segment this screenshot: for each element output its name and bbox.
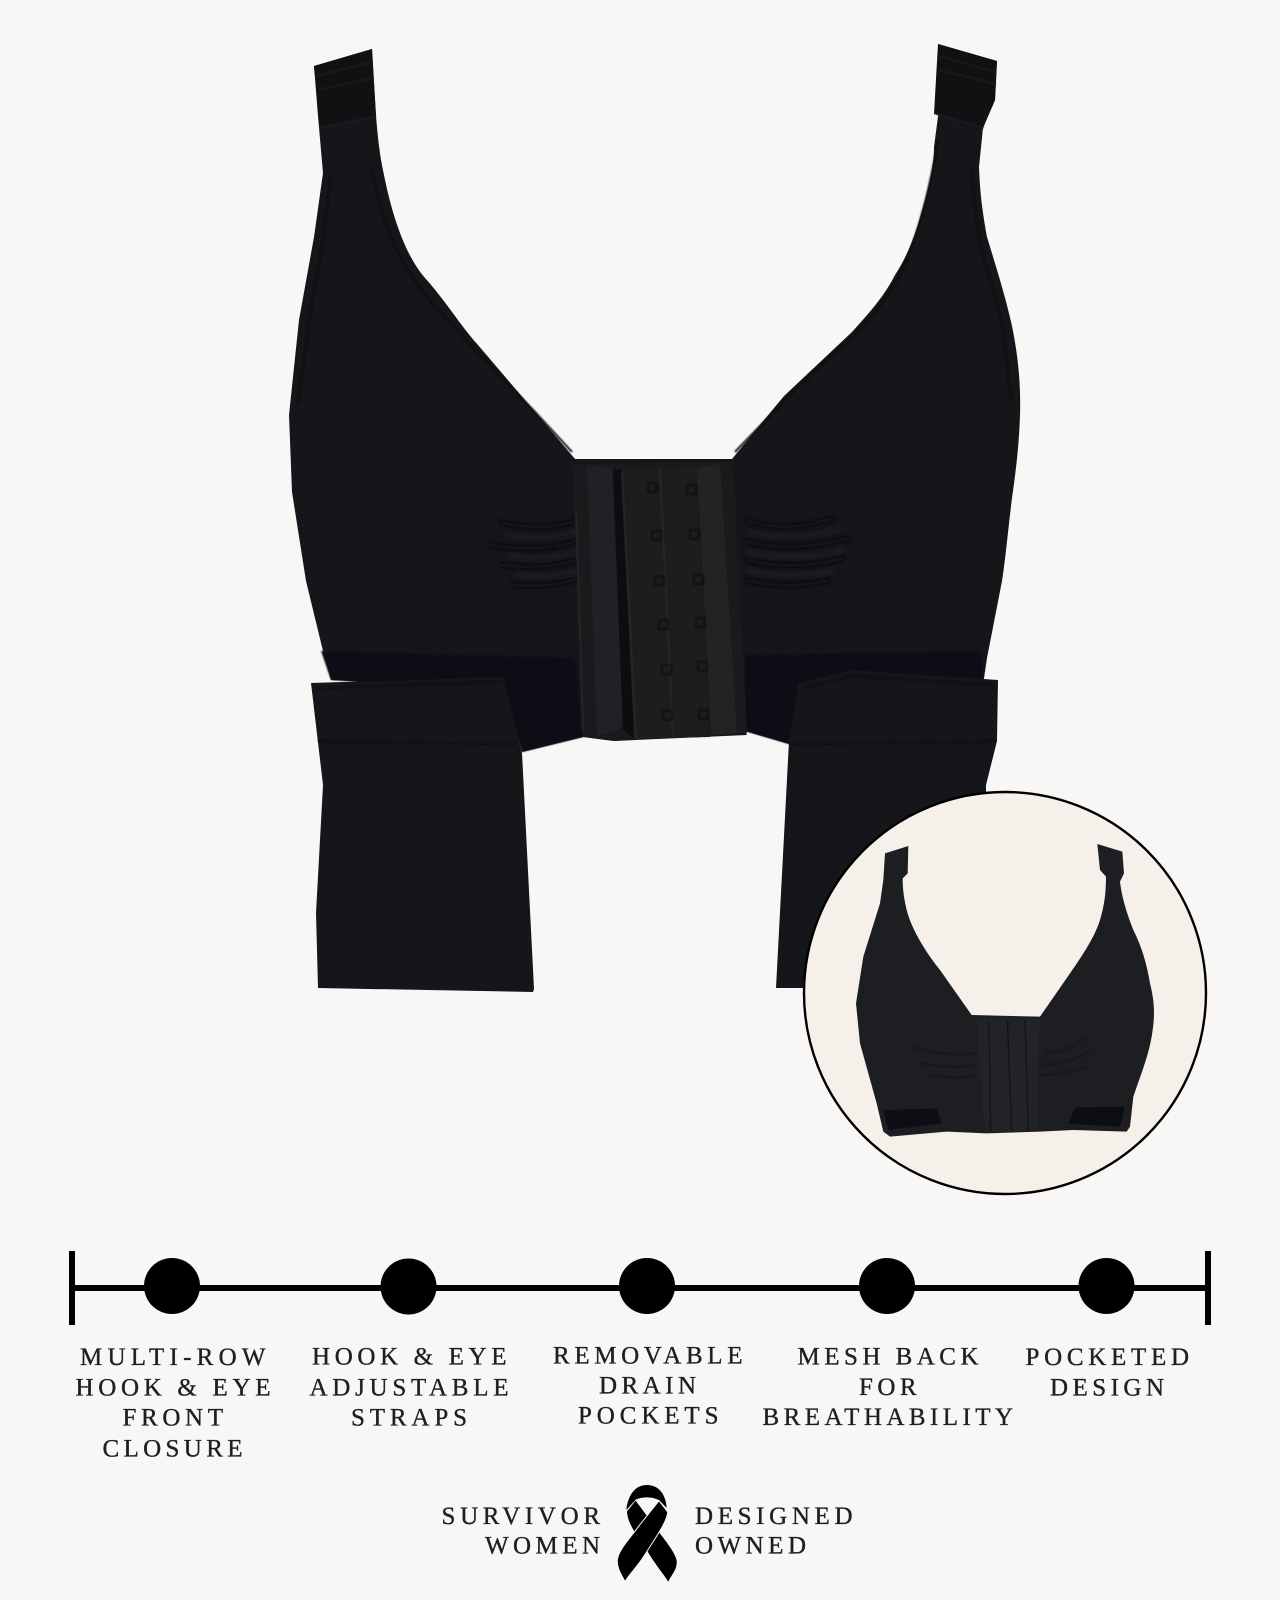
feature label: front closure: FRONT <box>122 1404 223 1432</box>
feature label: adjustable straps: STRAPS <box>351 1404 467 1432</box>
inset ruching <box>913 1037 1090 1077</box>
feature label: front closure: CLOSURE <box>102 1436 242 1462</box>
left drain pocket <box>311 677 534 992</box>
inset circle: bra with pockets removed <box>804 792 1206 1194</box>
feature label: drain pockets <box>553 1342 742 1430</box>
feature marker 4 <box>859 1258 915 1314</box>
under band <box>321 651 983 752</box>
feature label: mesh back: MESH BACK <box>798 1344 978 1370</box>
feature label: drain pockets: REMOVABLE <box>553 1342 742 1370</box>
text: survivor women <box>442 1503 600 1560</box>
feature label: pocketed design: DESIGN <box>1050 1374 1164 1402</box>
icon: awareness ribbon <box>617 1485 677 1582</box>
feature marker 5 <box>1078 1258 1134 1314</box>
hook tape <box>622 468 710 739</box>
satin placket left <box>587 465 623 737</box>
bra body <box>289 44 1020 752</box>
text: survivor women: SURVIVOR <box>442 1503 600 1530</box>
feature label: mesh back <box>762 1344 1013 1431</box>
strap adjusters <box>314 44 997 128</box>
hook eyes <box>648 483 708 720</box>
feature label: pocketed design <box>1026 1344 1189 1402</box>
feature label: adjustable straps: ADJUSTABLE <box>310 1374 508 1402</box>
feature label: adjustable straps <box>310 1344 508 1432</box>
feature marker 1 <box>144 1258 200 1314</box>
feature marker 3 <box>619 1258 675 1314</box>
main product photo: bra with drain pockets <box>289 44 1020 992</box>
feature label: front closure: HOOK & EYE <box>76 1374 270 1402</box>
text: designed owned: OWNED <box>695 1532 806 1560</box>
closure gap <box>613 469 634 738</box>
feature timeline <box>69 1251 1211 1462</box>
feature label: mesh back: BREATHABILITY <box>762 1404 1013 1431</box>
feature label: front closure: MULTI-ROW <box>80 1344 266 1371</box>
inset closure <box>977 1018 1039 1133</box>
feature label: pocketed design: POCKETED <box>1026 1344 1189 1371</box>
tape seam <box>576 469 673 738</box>
text: designed owned: DESIGNED <box>695 1503 852 1530</box>
gathered fabric ruching <box>490 518 850 586</box>
feature label: adjustable straps: HOOK & EYE <box>312 1344 506 1370</box>
grosgrain right <box>697 464 737 736</box>
neckline and armhole trim <box>298 140 1011 452</box>
brand statement footer <box>442 1485 852 1582</box>
front hook and eye closure <box>573 462 747 741</box>
feature label: mesh back: FOR <box>859 1374 917 1401</box>
feature label: drain pockets: POCKETS <box>578 1402 718 1430</box>
text: survivor women: WOMEN <box>485 1532 600 1560</box>
text: designed owned <box>695 1503 852 1560</box>
feature label: front closure <box>76 1344 270 1462</box>
feature marker 2 <box>380 1258 436 1314</box>
timeline rail <box>69 1251 1211 1325</box>
strap stitch lines <box>316 56 996 128</box>
inset bra <box>856 844 1154 1137</box>
inset velcro tabs <box>883 1107 1125 1130</box>
feature label: drain pockets: DRAIN <box>599 1372 696 1400</box>
circle background <box>804 792 1206 1194</box>
right drain pocket <box>776 670 998 988</box>
